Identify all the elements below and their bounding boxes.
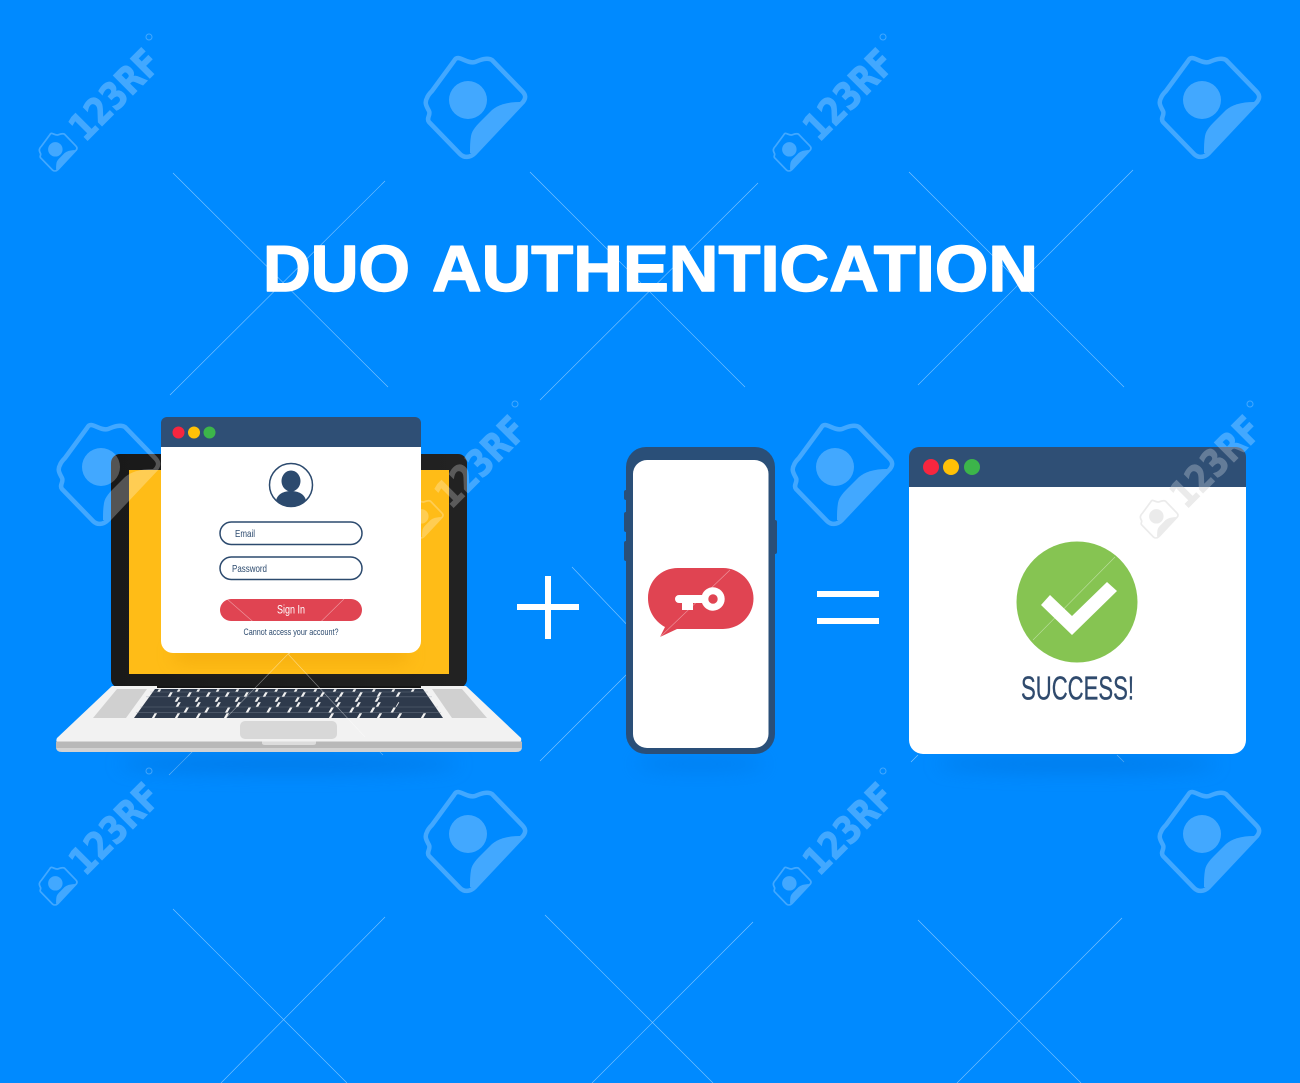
speaker left: [93, 689, 147, 718]
plus sign: [517, 576, 579, 639]
title: AUTHENTICATION: [432, 232, 1038, 305]
keyboard: [134, 689, 443, 718]
laptop base: [56, 686, 521, 742]
laptop base front edge: [56, 742, 522, 752]
speaker right: [432, 689, 487, 718]
phone screen: [633, 460, 768, 748]
sign in button: Sign In: [277, 604, 305, 616]
smartphone: [624, 447, 777, 771]
window buttons: [172, 426, 216, 438]
success window body: [909, 487, 1246, 754]
phone body: [626, 447, 775, 754]
equals sign: [817, 591, 879, 624]
key icon: [675, 587, 725, 611]
phone side buttons: [624, 490, 777, 561]
watermark lines: [169, 170, 1133, 1083]
laptop screen: [129, 470, 449, 674]
login window body: [161, 447, 421, 653]
thin lines over laptop: [225, 599, 365, 737]
green check badge: [1016, 542, 1138, 662]
watermark on white card: [1140, 487, 1210, 539]
watermark wordmarks: [39, 34, 1270, 905]
success window buttons: [923, 459, 980, 475]
bubble hairline: [660, 570, 730, 637]
hinge: [157, 686, 421, 688]
watermark logos: [59, 58, 1259, 891]
password field: Password: [232, 563, 267, 575]
phone shadow: [635, 757, 765, 771]
sign in button: [220, 599, 362, 621]
email field: [220, 522, 362, 544]
title: DUO: [263, 232, 410, 305]
success window: [909, 447, 1246, 772]
email field: Email: [235, 528, 255, 540]
laptop lid: [111, 454, 467, 688]
laptop with login window: [56, 417, 522, 773]
laptop notch: [262, 742, 316, 745]
laptop shadow: [119, 755, 459, 773]
avatar icon: [270, 464, 312, 507]
trackpad: [240, 721, 337, 739]
cannot access link: Cannot access your account?: [244, 627, 338, 638]
success label: SUCCESS!: [1021, 670, 1134, 706]
login window title bar: [161, 417, 421, 447]
login window shadow: [175, 648, 407, 660]
key message bubble: [648, 568, 753, 637]
success window shadow: [937, 756, 1217, 772]
laptop base front band: [56, 742, 522, 748]
success window title bar: [909, 447, 1246, 487]
password field: [220, 557, 362, 580]
